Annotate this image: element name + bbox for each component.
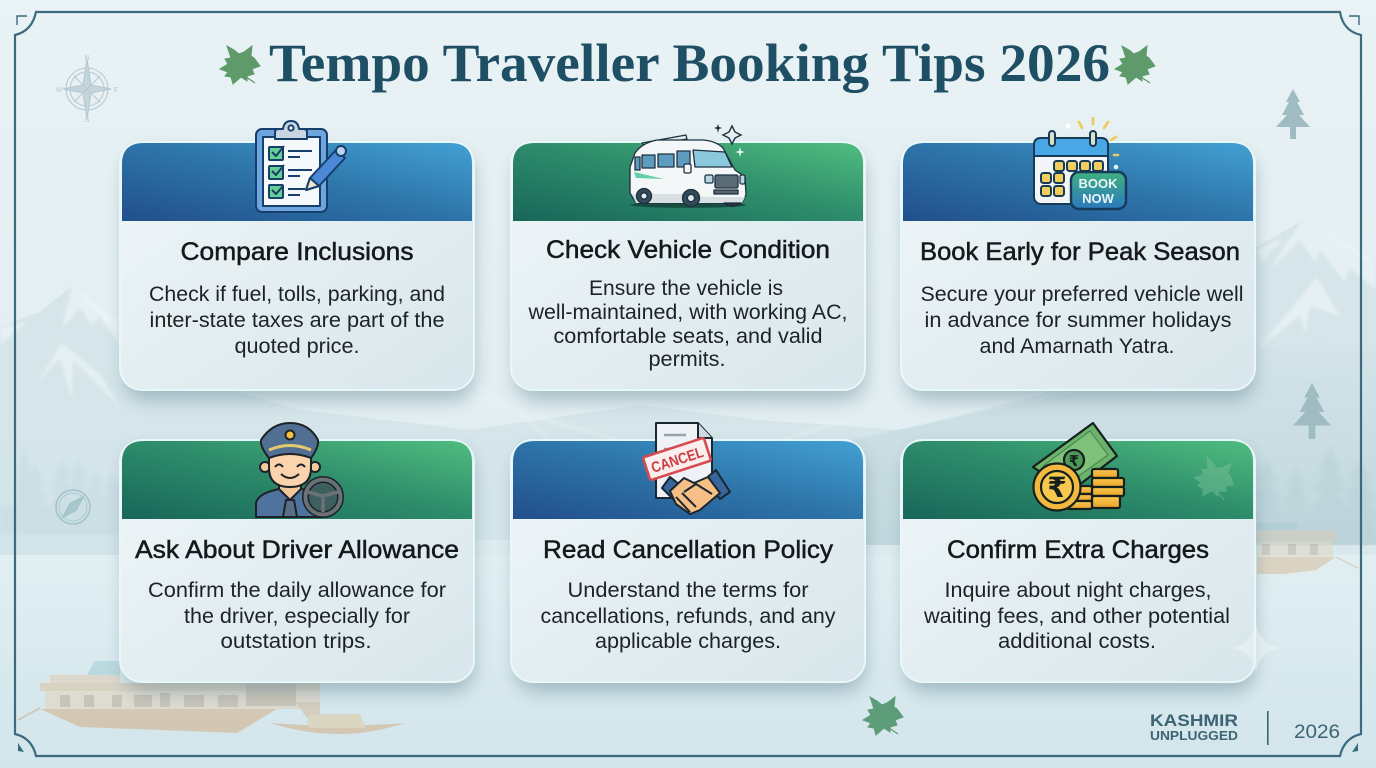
body text: Secure your preferred vehicle well [920,283,1244,306]
cancel stamp: CANCEL [649,444,706,477]
icon: rupee note and coins [1033,423,1124,510]
body text [920,283,1244,358]
footer brand: UNPLUGGED [1150,728,1238,743]
panel header [513,143,863,221]
panel header [903,143,1253,221]
body text [923,579,1230,653]
body text [540,579,836,653]
heading: Check Vehicle Condition [546,236,830,264]
body text: well-maintained, with working AC, [527,301,848,324]
maple leaf watermark bottom [863,697,903,735]
body text: Understand the terms for [568,579,808,602]
body text: waiting fees, and other potential [923,605,1230,628]
body text: and Amarnath Yatra. [980,335,1174,358]
body text [527,277,848,371]
heading: Compare Inclusions [180,238,414,266]
heading: Confirm Extra Charges [947,536,1209,564]
rupee symbols [1047,452,1079,504]
compass rose watermark: N [84,55,90,62]
panel header [122,143,472,221]
footer brand [1150,711,1340,745]
body text: Ensure the vehicle is [589,277,783,300]
icon: sparkles [714,124,745,157]
badge text: BOOK [1078,176,1118,191]
body text: comfortable seats, and valid [554,325,822,348]
footer brand: 2026 [1294,722,1340,743]
body text: outstation trips. [220,630,372,653]
compass rose watermark: S [85,117,90,124]
compass rose watermark: W [56,87,63,94]
heading: Read Cancellation Policy [543,536,834,564]
icon: smiling driver with steering wheel [256,423,343,517]
panel header [903,441,1253,519]
rupee symbols: ₹ [1069,452,1079,470]
decorative sparkle [1232,624,1280,672]
panel header [122,441,472,519]
houseboat watermark lower left [18,661,405,734]
tree watermark upper right [1276,89,1310,139]
body text: additional costs. [998,630,1156,653]
panel: Check Vehicle Condition [511,124,865,400]
icon: calendar with book now badge [1034,131,1126,209]
icon: cancelled document and handshake [656,423,730,514]
icon: tempo traveller van [630,135,746,208]
panel: Read Cancellation Policy [511,423,865,692]
panel: Book Early for Peak Season [901,118,1255,400]
rupee symbols: ₹ [1047,471,1067,504]
ridge highlights [470,385,860,440]
houseboat watermark right [1257,523,1358,574]
heading: Ask About Driver Allowance [135,536,459,564]
body text [149,283,445,358]
body text: in advance for summer holidays [924,309,1232,332]
compass rose watermark [56,55,119,124]
badge text [1078,176,1118,206]
body text: permits. [648,348,726,371]
body text: quoted price. [234,335,360,358]
title with maple leaves: Tempo Traveller Booking Tips 2026 [269,33,1110,93]
treeline [0,446,128,537]
body text: cancellations, refunds, and any [540,605,836,628]
panel: Confirm Extra Charges [901,423,1255,692]
panel header [513,441,863,519]
footer brand: KASHMIR [1150,712,1238,730]
icon: maple leaf watermark in header [1191,455,1239,502]
heading: Book Early for Peak Season [920,238,1240,266]
panel: Ask About Driver Allowance [120,423,474,692]
icon: clipboard and pencil [256,121,346,212]
small compass watermark [56,490,90,524]
body text: Check if fuel, tolls, parking, and [149,283,445,306]
icon: sun rays [1067,118,1118,168]
body text: Confirm the daily allowance for [148,579,446,602]
body text: Inquire about night charges, [944,579,1212,602]
body text: applicable charges. [595,630,781,653]
badge text: NOW [1082,191,1115,206]
panel: Compare Inclusions [120,121,474,400]
body text [148,579,446,653]
body text: inter-state taxes are part of the [150,309,444,332]
body text: the driver, especially for [184,605,410,628]
compass rose watermark: E [114,87,119,94]
snow caps [0,220,1376,407]
tree watermark lower right [1293,383,1331,439]
